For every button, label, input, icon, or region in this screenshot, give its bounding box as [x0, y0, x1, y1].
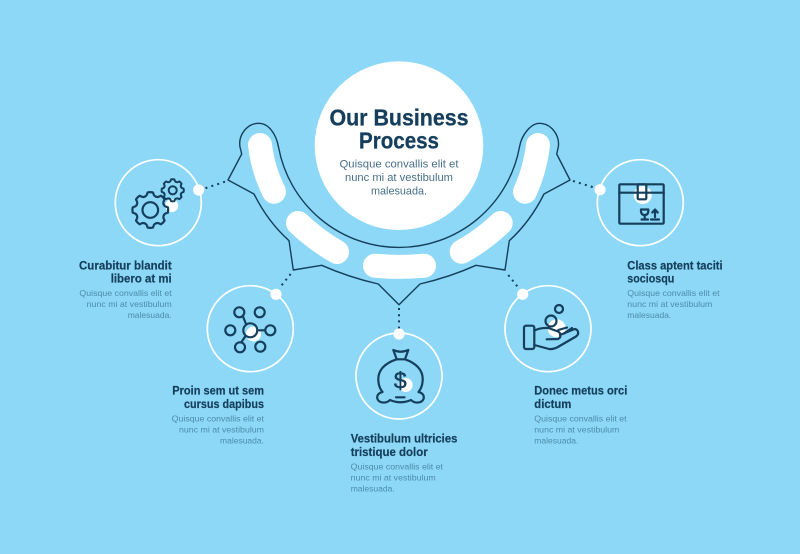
heading: cursus dapibus: [184, 397, 264, 411]
description: nunc mi at vestibulum: [534, 425, 619, 435]
heading: Curabitur blandit: [79, 258, 172, 272]
central title panel: [315, 61, 483, 230]
heading: dictum: [534, 397, 571, 411]
description: Quisque convallis elit et: [340, 158, 459, 170]
description: malesuada.: [627, 310, 671, 320]
gear-shaped arc outline: [228, 123, 570, 305]
description: Quisque convallis elit et: [172, 414, 265, 424]
dollar sign: $: [394, 368, 407, 394]
heading: sociosqu: [627, 272, 674, 286]
description: nunc mi at vestibulum: [345, 172, 453, 184]
description: nunc mi at vestibulum: [351, 472, 436, 482]
step 3: money bag: [351, 328, 458, 493]
description: nunc mi at vestibulum: [87, 299, 172, 309]
description: Quisque convallis elit et: [627, 288, 720, 298]
white arc segments: [260, 145, 538, 267]
icon: package box: [619, 184, 664, 224]
title: Process: [359, 127, 439, 153]
icon: hand with coins: [524, 305, 578, 349]
description: malesuada.: [534, 436, 578, 446]
heading: Proin sem ut sem: [172, 383, 264, 397]
heading: Class aptent taciti: [627, 258, 723, 272]
icon: money bag: [377, 350, 424, 403]
description: malesuada.: [220, 436, 264, 446]
description: malesuada.: [371, 185, 427, 197]
heading: libero at mi: [111, 272, 172, 286]
description: Quisque convallis elit et: [534, 414, 627, 424]
step 2: network: [172, 286, 293, 446]
dotted connectors: [205, 181, 594, 329]
description: Quisque convallis elit et: [351, 461, 444, 471]
step 5: package box: [594, 160, 723, 320]
description: malesuada.: [128, 310, 172, 320]
step 4: hand with coins: [505, 286, 627, 446]
description: Quisque convallis elit et: [79, 288, 172, 298]
icon: gears: [132, 179, 184, 228]
heading: Vestibulum ultricies: [351, 431, 458, 445]
description: nunc mi at vestibulum: [179, 425, 264, 435]
title: Our Business: [330, 104, 468, 130]
step 1: gears: [79, 160, 204, 320]
icon: network: [225, 307, 275, 352]
heading: Donec metus orci: [534, 383, 627, 397]
heading: tristique dolor: [351, 445, 428, 459]
description: malesuada.: [351, 483, 395, 493]
description: nunc mi at vestibulum: [627, 299, 712, 309]
